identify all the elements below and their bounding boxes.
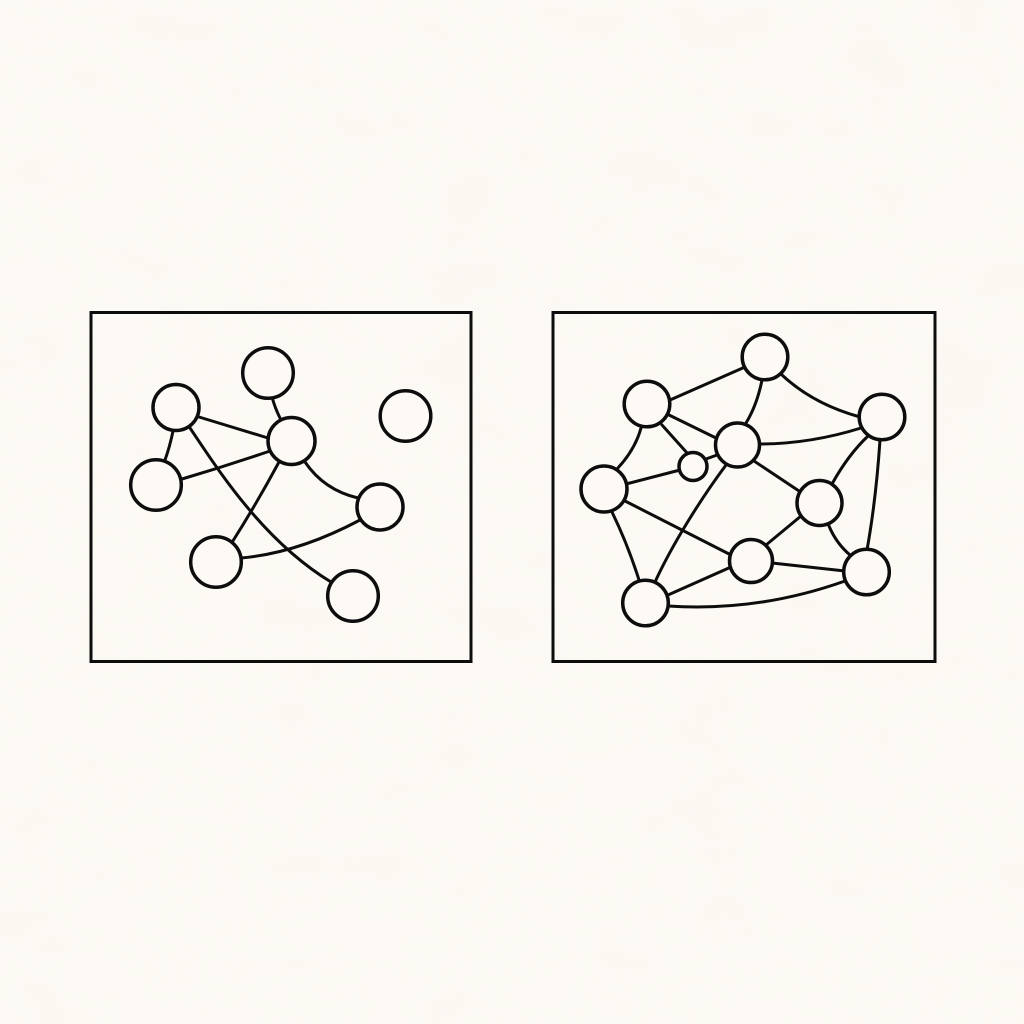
edges: dense network [612, 367, 880, 607]
edges: sparse network [165, 397, 360, 582]
nodes: dense network [581, 334, 905, 626]
panel: sparse network [91, 312, 471, 662]
panel: dense network [553, 312, 935, 662]
nodes: sparse network [131, 348, 431, 621]
